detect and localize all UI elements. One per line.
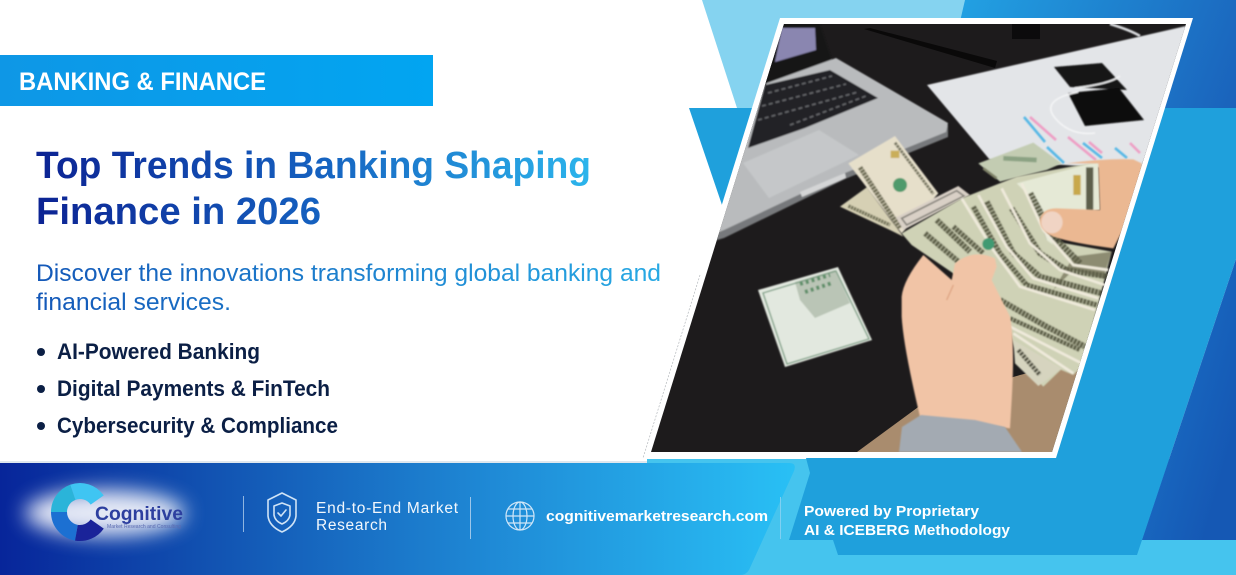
feature text: end-to-end — [316, 500, 459, 534]
chart bars on paper — [1024, 117, 1140, 163]
category banner — [0, 55, 433, 106]
divider — [780, 497, 781, 539]
logo: Market Research and Consulting — [107, 524, 181, 530]
title: Finance in 2026 — [36, 191, 321, 233]
upper hand — [1040, 159, 1142, 248]
photo: hands counting cash on a desk — [640, 20, 1200, 460]
divider — [243, 496, 244, 532]
photo detail: cash and hands, drawn in 3x crop coordinates — [840, 136, 1142, 428]
icon: globe — [506, 502, 534, 530]
logo mark: segmented C — [59, 491, 97, 533]
lower hand — [902, 254, 1013, 428]
note on desk — [758, 267, 872, 367]
feature text: end-to-end: Research — [316, 517, 387, 534]
title: Top Trends in Banking Shaping — [36, 145, 591, 187]
desk: wooden floor — [857, 360, 1081, 452]
logo — [25, 490, 185, 536]
loose notes behind the fan — [840, 136, 970, 237]
photo frame — [643, 18, 1193, 458]
methodology text: Powered by Proprietary — [804, 504, 979, 520]
logo: Cognitive — [95, 504, 183, 525]
paper sheet — [927, 26, 1186, 170]
laptop — [700, 24, 948, 245]
title — [36, 145, 591, 233]
shirt cuff — [899, 415, 1022, 452]
bullet list: AI-Powered Banking — [57, 339, 260, 364]
category banner: BANKING & FINANCE — [19, 68, 266, 96]
phones and cable — [1051, 24, 1144, 133]
pens — [864, 28, 997, 68]
footer bar — [0, 461, 795, 575]
icon: shield — [268, 493, 296, 532]
methodology text — [804, 504, 1010, 539]
subtitle: Discover the innovations transforming global banking and — [36, 260, 661, 287]
bullet list: Digital Payments & FinTech — [57, 376, 330, 401]
feature text: end-to-end: End-to-End Market — [316, 500, 459, 517]
fanned notes — [902, 162, 1112, 387]
methodology text: AI & ICEBERG Methodology — [804, 523, 1010, 539]
subtitle: financial services. — [36, 289, 231, 316]
subtitle — [36, 260, 661, 316]
bullet list — [37, 339, 338, 438]
divider — [470, 497, 471, 539]
back stack of notes — [978, 143, 1062, 182]
website url: cognitivemarketresearch.com — [546, 508, 768, 525]
bullet list: Cybersecurity & Compliance — [57, 413, 338, 438]
